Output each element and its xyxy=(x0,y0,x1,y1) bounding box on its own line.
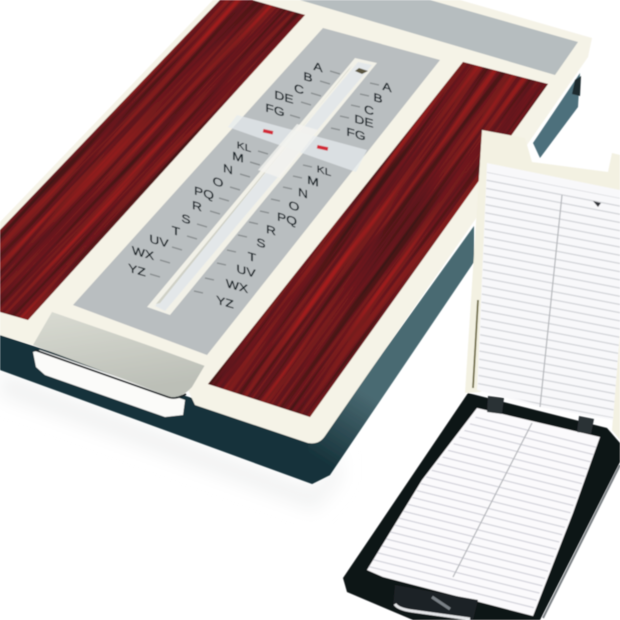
alphabet labels: left column: B xyxy=(303,69,313,85)
alphabet labels: left column: DE xyxy=(274,88,294,106)
box: cream top xyxy=(0,0,592,443)
alphabet labels: right column: C xyxy=(364,102,374,118)
panel: right wood inlay xyxy=(208,62,548,418)
alphabet labels: right column: B xyxy=(373,90,383,106)
chrome clip on tray xyxy=(393,585,478,620)
alphabet labels: left column: R xyxy=(192,198,202,214)
lid: cream frame xyxy=(465,130,620,440)
alphabet labels: left column: FG xyxy=(265,101,285,119)
open card holder: black tray xyxy=(343,393,620,620)
alphabet labels: right column: FG xyxy=(346,125,366,143)
alphabet labels: left column: M xyxy=(232,149,244,165)
alphabet labels: right column: R xyxy=(266,222,276,238)
alphabet labels: left column: N xyxy=(223,161,233,177)
alphabet labels: left column: KL xyxy=(237,140,251,155)
alphabet labels: left column: YZ xyxy=(128,261,146,279)
alphabet labels: right column xyxy=(194,79,392,311)
alphabet labels: right column: WX xyxy=(226,276,248,296)
shadow under box xyxy=(0,372,340,510)
alphabet labels: left column: WX xyxy=(132,243,154,263)
alphabet labels: left column: O xyxy=(213,174,223,190)
index slot xyxy=(147,58,377,315)
alphabet labels: right column: O xyxy=(289,198,299,214)
chrome pull tab xyxy=(33,308,208,417)
alphabet labels: left column: UV xyxy=(149,232,169,250)
upper card xyxy=(470,160,620,430)
alphabet labels: left column: S xyxy=(181,211,191,227)
alphabet labels: left column: T xyxy=(172,223,180,239)
lid: olive edge xyxy=(473,300,478,388)
clear sliding indicator xyxy=(228,115,367,178)
alphabet labels: right column: KL xyxy=(317,164,331,179)
tray right rim highlight xyxy=(543,465,620,618)
alphabet labels: left column: C xyxy=(294,81,304,97)
alphabet labels: left column: PQ xyxy=(194,184,214,202)
red marker right xyxy=(317,145,328,151)
box: dark side walls xyxy=(0,73,581,484)
alphabet labels: right column: M xyxy=(307,173,319,189)
alphabet labels: right column: DE xyxy=(354,112,374,130)
panel: left wood inlay xyxy=(0,0,306,320)
alphabet labels: right column: PQ xyxy=(277,210,297,228)
alphabet labels: right column: T xyxy=(248,249,256,265)
alphabet labels: right column: YZ xyxy=(216,293,234,311)
card retaining clips xyxy=(487,396,594,434)
alphabet labels: right column: UV xyxy=(236,262,256,280)
alphabet labels: right column: A xyxy=(382,79,392,95)
alphabet labels: left column xyxy=(128,59,340,279)
alphabet labels: right column: S xyxy=(256,235,266,251)
panel: central grey index plate xyxy=(73,28,440,355)
alphabet labels: right column: N xyxy=(298,185,308,201)
top grey strip xyxy=(292,0,578,75)
red marker left xyxy=(263,129,273,135)
alphabet labels: left column: A xyxy=(313,59,323,75)
lower card xyxy=(360,405,605,616)
